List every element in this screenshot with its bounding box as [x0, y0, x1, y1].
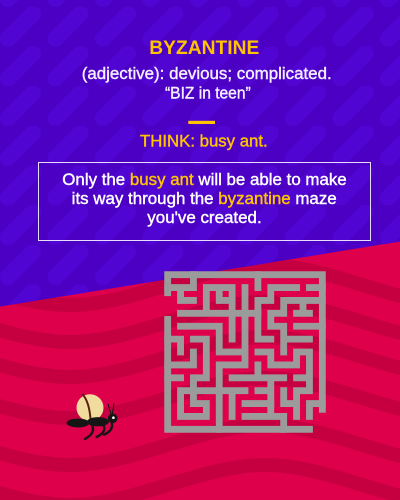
callout: example sentence box: its way through the byzantine maze	[72, 190, 337, 208]
callout: example sentence box	[38, 162, 370, 240]
maze	[168, 275, 322, 429]
panel: purple striped background	[0, 0, 400, 306]
definition text: “BIZ in teen”	[165, 83, 251, 102]
callout: example sentence box: you've created.	[147, 209, 262, 227]
think mnemonic: THINK: busy ant.	[140, 132, 268, 151]
panel: red wavy background	[0, 230, 400, 500]
definition text: (adjective): devious; complicated.	[82, 64, 332, 83]
callout: example sentence box: Only the busy ant will be able to make	[62, 171, 347, 189]
divider bar	[188, 121, 215, 124]
icon: ant carrying a seed	[66, 394, 117, 439]
definition text	[82, 64, 332, 102]
title: BYZANTINE	[149, 38, 259, 59]
